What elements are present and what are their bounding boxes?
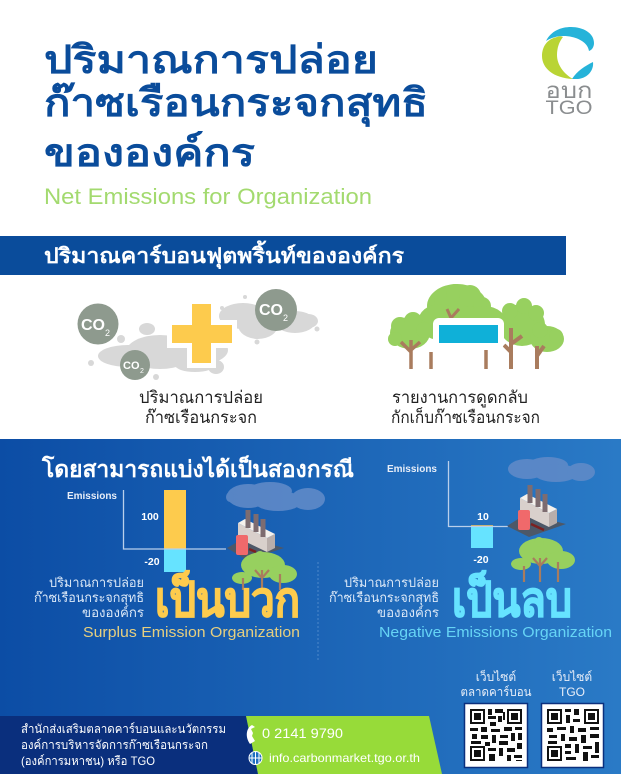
footer: organisation: (องค์การมหาชน) หรือ TGO [21, 754, 155, 768]
label: greenhouse gas emissions: ปริมาณการปล่อย [139, 388, 263, 407]
footer: contacts [246, 716, 442, 774]
chart: negative: -20 [473, 554, 489, 566]
icon: globe [249, 752, 262, 764]
section banner [0, 236, 566, 275]
CO2 badge 1: CO [81, 317, 105, 334]
QR label 2: เว็บไซต์ [552, 669, 592, 684]
CO2 badge 3 [120, 350, 150, 380]
title: ก๊าซเรือนกระจกสุทธิ [44, 82, 428, 127]
text: negative description: ขององค์กร [377, 605, 439, 620]
chart: negative: Emissions [387, 464, 437, 475]
icon: phone [247, 725, 255, 744]
section banner: ปริมาณคาร์บอนฟุตพริ้นท์ขององค์กร [44, 240, 405, 270]
footer: organisation [0, 716, 258, 774]
title [44, 39, 428, 175]
label: absorption report: กักเก็บก๊าซเรือนกระจก [391, 406, 540, 427]
illustration: emissions cloud with plus [78, 289, 320, 380]
text: surplus english: Surplus Emission Organization [83, 624, 300, 641]
minus sign [433, 318, 504, 349]
CO2 badge 2: 2 [283, 313, 288, 323]
panel: two cases [0, 439, 621, 774]
footer: organisation: สำนักส่งเสริมตลาดคาร์บอนและนวัตกรรม [21, 722, 226, 736]
CO2 badge 2 [255, 289, 297, 331]
text: negative description: ก๊าซเรือนกระจกสุทธิ [329, 590, 439, 606]
label: greenhouse gas emissions: ก๊าซเรือนกระจก [145, 408, 257, 427]
QR code 1 [464, 704, 528, 768]
logo: TGO [546, 98, 592, 119]
chart: negative [387, 461, 508, 566]
text: surplus description: ปริมาณการปล่อย [49, 575, 144, 590]
logo [542, 27, 594, 119]
label: absorption report [391, 388, 540, 427]
title: ขององค์กร [44, 130, 255, 175]
plus sign [167, 299, 237, 368]
footer: contacts: info.carbonmarket.tgo.or.th [269, 751, 420, 765]
illustration: factory and tree, surplus [226, 482, 325, 590]
CO2 badge 1: 2 [105, 328, 110, 338]
chart: surplus: 100 [141, 511, 159, 523]
CO2 badge 2: CO [259, 302, 283, 319]
CO2 badge 3: CO [123, 360, 140, 372]
QR label 1 [460, 669, 532, 699]
illustration: trees with minus [388, 284, 564, 369]
CO2 badge 1 [78, 304, 118, 344]
divider [317, 562, 319, 660]
QR label 2: TGO [559, 685, 585, 699]
label: absorption report: รายงานการดูดกลับ [392, 388, 528, 408]
text: surplus description: ขององค์กร [82, 605, 144, 620]
footer: organisation: องค์การบริหารจัดการก๊าซเรือนกระจก [21, 738, 208, 752]
illustration: factory and tree, negative [507, 457, 595, 582]
logo: อบก [546, 78, 592, 103]
subtitle: Net Emissions for Organization [44, 184, 372, 209]
text: surplus description: ก๊าซเรือนกระจกสุทธิ [34, 590, 144, 606]
text: negative description: ปริมาณการปล่อย [344, 575, 439, 590]
chart: surplus [67, 490, 226, 572]
QR label 1: ตลาดคาร์บอน [460, 685, 532, 699]
text: negative: เป็นลบ [452, 570, 572, 627]
CO2 badge 3: 2 [140, 368, 144, 375]
chart: negative: 10 [477, 511, 489, 523]
QR label 1: เว็บไซต์ [476, 669, 516, 684]
QR label 2 [552, 669, 592, 699]
label: greenhouse gas emissions [139, 388, 263, 427]
chart: surplus: -20 [144, 556, 160, 568]
QR code 2 [542, 704, 604, 768]
text: negative english: Negative Emissions Organization [379, 624, 612, 641]
text: negative description [329, 575, 439, 620]
text: positive: เป็นบวก [155, 570, 300, 627]
text: surplus description [34, 575, 144, 620]
heading: two cases: โดยสามารถแบ่งได้เป็นสองกรณี [41, 454, 354, 482]
footer: contacts: 0 2141 9790 [262, 726, 343, 741]
title: ปริมาณการปล่อย [44, 39, 378, 82]
chart: surplus: Emissions [67, 491, 117, 502]
